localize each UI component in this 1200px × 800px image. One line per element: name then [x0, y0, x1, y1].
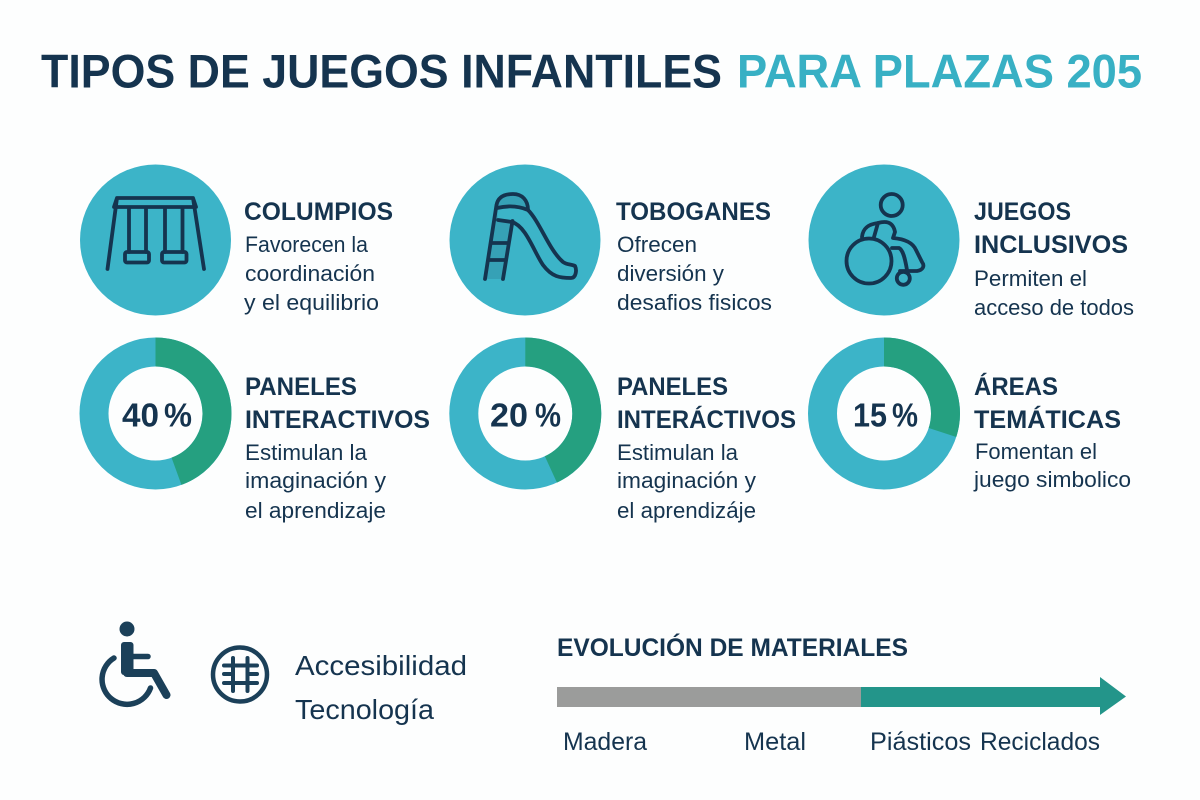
- panel: toboganes: [450, 164, 772, 316]
- text: juegos inclusivos: JUEGOS: [974, 198, 1071, 226]
- text: paneles interactivos: Estimulan la: [617, 440, 739, 465]
- icon: swing set: [80, 164, 231, 316]
- panel: paneles interactivos 20: [464, 352, 796, 523]
- text: columpios: y el equilibrio: [244, 290, 379, 315]
- legend label: tecnologia: Tecnología: [295, 694, 434, 725]
- timeline labels: Reciclados: [980, 728, 1100, 756]
- panel: columpios: [80, 164, 393, 316]
- timeline labels: Metal: [744, 728, 806, 756]
- text: toboganes: [616, 198, 772, 315]
- donut chart: 20%: 20: [490, 396, 528, 434]
- panel: paneles interactivos 40: [94, 352, 430, 523]
- text: juegos inclusivos: INCLUSIVOS: [974, 231, 1128, 259]
- text: columpios: COLUMPIOS: [244, 198, 393, 226]
- text: toboganes: desafios fisicos: [617, 290, 772, 315]
- icon: technology: [213, 648, 267, 702]
- timeline heading: EVOLUCIÓN DE MATERIALES: [557, 632, 908, 662]
- text: columpios: Favorecen la: [245, 232, 369, 257]
- text: areas tematicas: ÁREAS: [974, 372, 1058, 401]
- text: paneles interactivos: INTERÁCTIVOS: [617, 405, 796, 434]
- text: paneles interactivos: imaginación y: [617, 468, 756, 493]
- text: juegos inclusivos: Permiten el: [974, 266, 1087, 291]
- legend: [102, 622, 467, 725]
- text: paneles interactivos: Estimulan la: [245, 440, 368, 465]
- text: areas tematicas: [973, 372, 1131, 492]
- legend label: accesibilidad: Accesibilidad: [295, 650, 467, 681]
- icon: accessibility: [102, 622, 166, 704]
- donut chart: 20%: %: [535, 396, 561, 434]
- arrow: green segment: [861, 677, 1126, 715]
- text: paneles interactivos: [245, 373, 430, 523]
- text: areas tematicas: juego simbolico: [973, 467, 1131, 492]
- text: juegos inclusivos: acceso de todos: [974, 295, 1134, 320]
- donut chart: 15%: 15: [853, 396, 887, 434]
- title: [41, 44, 1142, 98]
- text: paneles interactivos: imaginación y: [245, 468, 386, 493]
- title: TIPOS DE JUEGOS INFANTILES: [41, 44, 722, 98]
- text: columpios: coordinación: [245, 261, 375, 286]
- text: juegos inclusivos: [974, 198, 1134, 320]
- text: areas tematicas: Fomentan el: [975, 439, 1097, 464]
- text: columpios: [244, 198, 393, 315]
- timeline labels: [563, 728, 1100, 756]
- timeline: evolucion de materiales: [557, 632, 1126, 756]
- bar: gray segment: [557, 687, 861, 707]
- text: areas tematicas: TEMÁTICAS: [974, 405, 1121, 434]
- donut chart: 15%: %: [892, 396, 918, 434]
- text: toboganes: Ofrecen: [617, 232, 697, 257]
- timeline labels: Madera: [563, 728, 647, 756]
- text: toboganes: diversión y: [617, 261, 724, 286]
- timeline labels: Piásticos: [870, 728, 971, 756]
- donut chart: 40%: %: [164, 396, 192, 434]
- donut chart: 15%: [822, 352, 946, 475]
- title: PARA PLAZAS 205: [737, 44, 1142, 98]
- panel: areas tematicas: [822, 352, 1131, 492]
- text: paneles interactivos: [617, 373, 796, 523]
- donut chart: 40%: 40: [122, 396, 159, 434]
- text: paneles interactivos: PANELES: [245, 373, 357, 401]
- donut chart: 20%: [464, 352, 587, 475]
- icon: slide: [450, 164, 600, 316]
- icon: wheelchair user: [808, 164, 960, 316]
- text: paneles interactivos: el aprendizáje: [617, 498, 756, 523]
- text: toboganes: TOBOGANES: [616, 198, 771, 226]
- text: paneles interactivos: PANELES: [617, 373, 728, 401]
- panel: juegos inclusivos: [808, 164, 1134, 320]
- text: paneles interactivos: INTERACTIVOS: [245, 406, 430, 434]
- text: paneles interactivos: el aprendizaje: [245, 498, 386, 523]
- donut chart: 40%: [94, 352, 217, 475]
